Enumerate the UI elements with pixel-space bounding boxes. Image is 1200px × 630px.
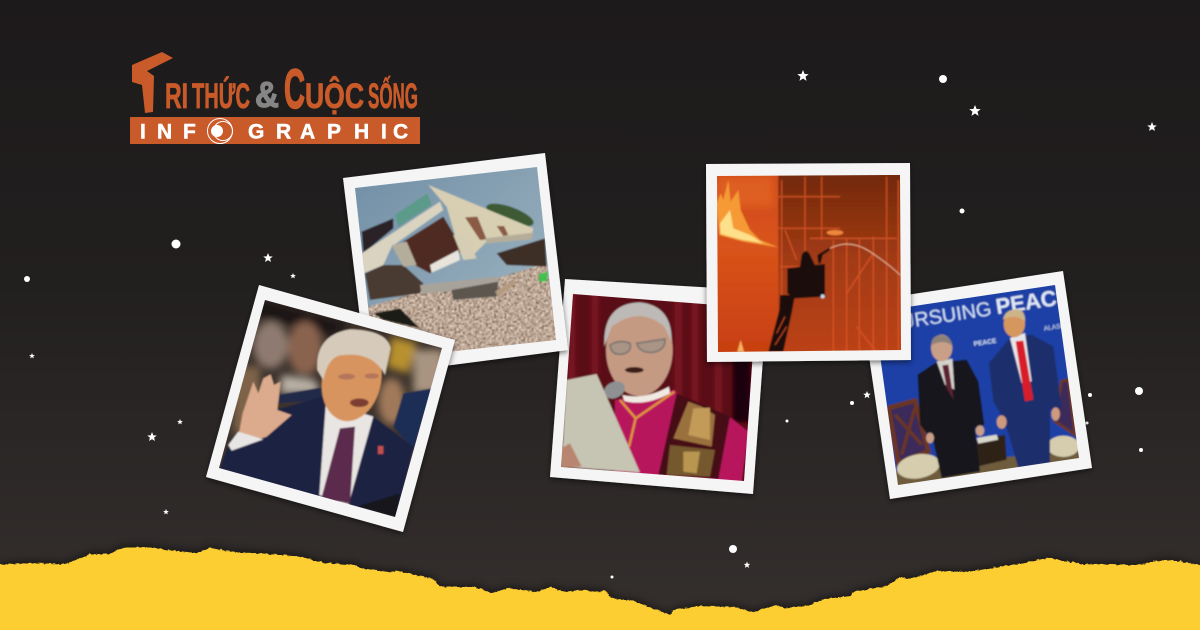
firefighter and ladder [787, 251, 825, 298]
logo wordmark: C [284, 57, 305, 120]
stole [658, 393, 730, 479]
right chair [1047, 380, 1079, 457]
logo wordmark: & [255, 74, 279, 115]
photo: Donald Trump taking oath [200, 280, 460, 535]
scaffolding [778, 177, 898, 357]
suit [220, 399, 413, 508]
tie [322, 427, 355, 504]
backdrop text: PEACE [973, 338, 997, 348]
torn yellow paper strip [0, 547, 1200, 630]
photo: Putin and Trump at Alaska summit [861, 268, 1095, 503]
backdrop text [910, 290, 1061, 348]
logo T mark [132, 52, 173, 113]
logo wordmark: RI [165, 77, 188, 116]
logo wordmark: THỨC [192, 76, 250, 116]
Putin [918, 335, 984, 478]
microphone [604, 380, 626, 400]
water jet [830, 244, 900, 275]
logo wordmark [165, 57, 418, 120]
flag pin [378, 446, 383, 454]
torn paper shadow [0, 545, 1200, 630]
photo: Vatican official at microphone [545, 275, 770, 500]
logo infographic banner: GRAPHIC [248, 120, 408, 144]
backdrop text: PEACE [994, 283, 1073, 319]
left chair [888, 401, 942, 482]
starfield: dots and stars [24, 70, 1157, 578]
face [320, 354, 383, 422]
dark foreground [357, 493, 400, 517]
Trump [989, 309, 1062, 468]
flames [717, 180, 778, 247]
logo: Tri Thức & Cuộc Sống Infographic [130, 52, 420, 144]
floor and table [896, 450, 1079, 485]
logo infographic banner: INF [140, 120, 196, 144]
shirt [319, 402, 373, 505]
logo: Tri Thức & Cuộc Sống Infographic: SỐNG [368, 76, 418, 116]
logo infographic banner [130, 117, 420, 144]
backdrop text: PURSUING [885, 298, 993, 336]
backdrop text: ALASKA 2025 [1043, 319, 1086, 333]
logo wordmark: UỘC [305, 76, 364, 116]
rubble [368, 264, 556, 352]
collar [622, 387, 670, 403]
photo: collapsed building after earthquake [340, 150, 570, 376]
raised hand [238, 374, 292, 440]
paper [562, 374, 640, 472]
building [362, 218, 393, 253]
head [606, 304, 673, 396]
photo: firefighter at burning scaffolded tower [706, 163, 911, 362]
